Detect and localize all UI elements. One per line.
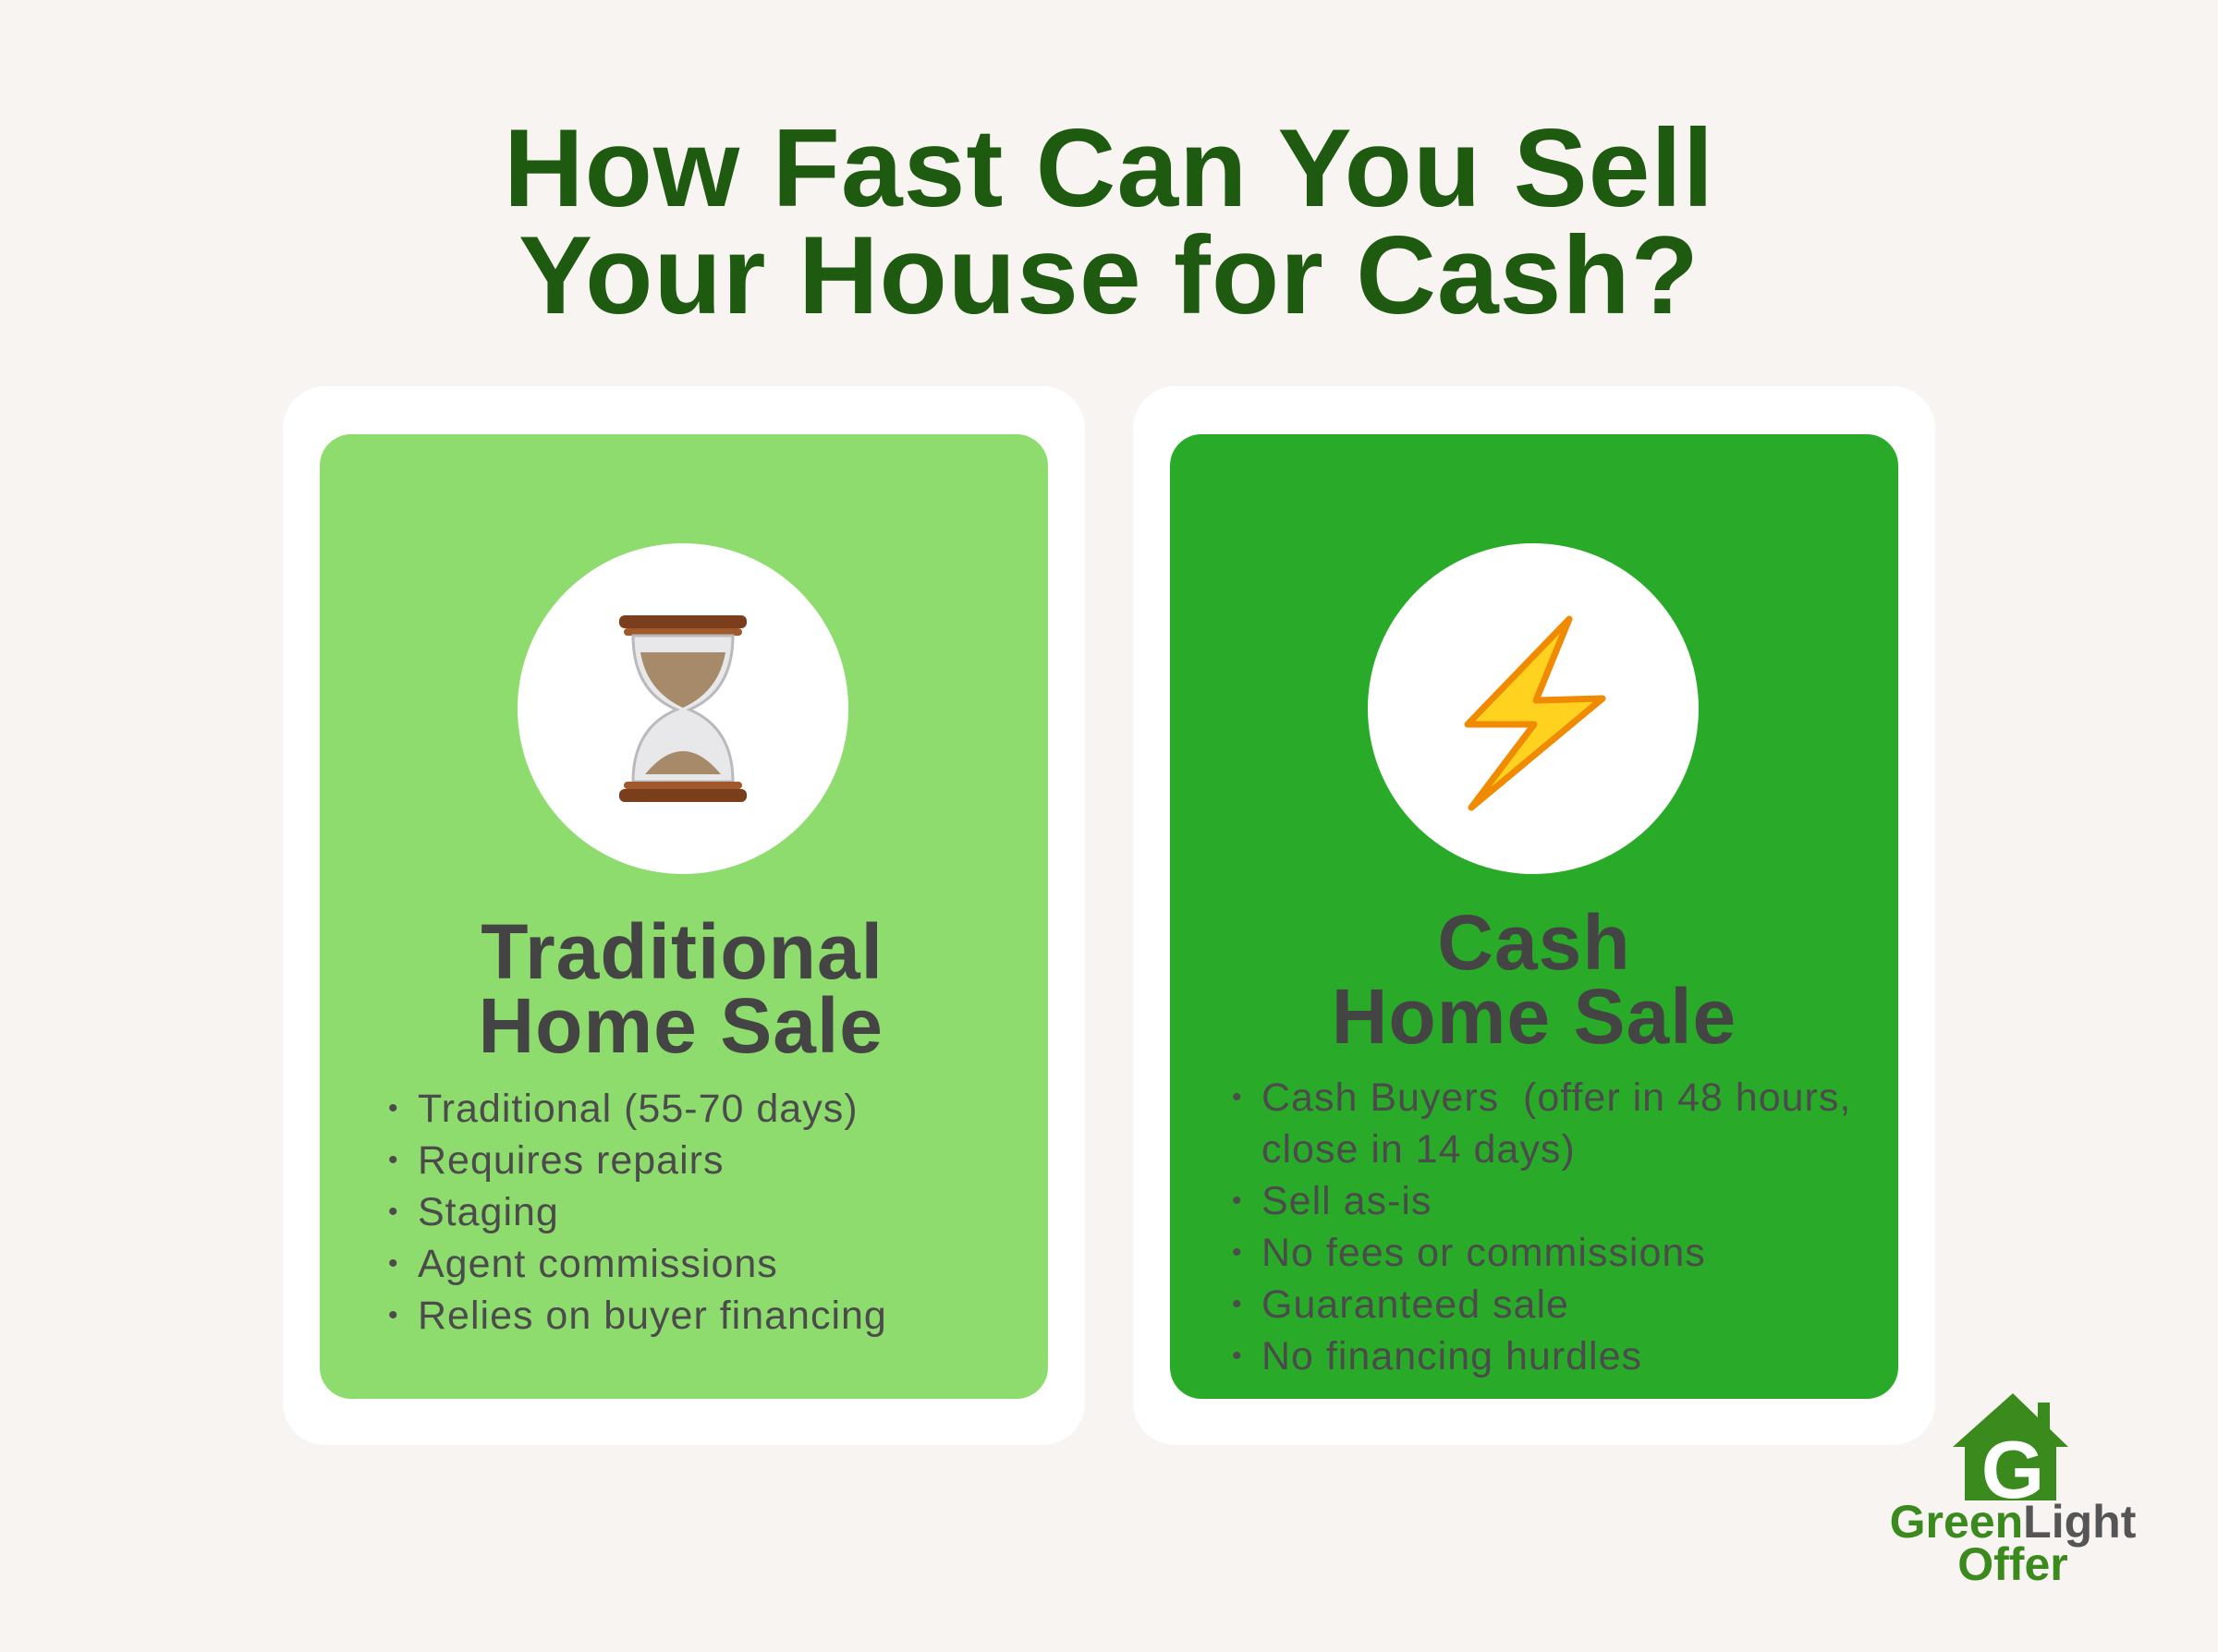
traditional green card [320,434,1048,1399]
list: traditional: Traditional (55-70 days) [418,1087,859,1131]
list: traditional: Requires repairs [418,1138,724,1183]
logo text [1890,1496,2136,1590]
logo text: Offer [1957,1538,2068,1590]
icon: hourglass [518,543,848,874]
list: traditional [389,1087,887,1338]
heading: traditional: Home Sale [478,982,884,1069]
list: traditional: Relies on buyer financing [418,1294,887,1338]
list: cash: Cash Buyers (offer in 48 hours, close in 14 days) [1261,1075,1851,1172]
heading: traditional [478,908,884,1069]
list: cash: Guaranteed sale [1261,1282,1569,1327]
heading: cash: Cash [1437,899,1631,986]
list: cash: No financing hurdles [1261,1334,1642,1379]
cash green card [1170,434,1898,1399]
list: cash [1233,1075,1851,1379]
title: Your House for Cash? [518,213,1700,337]
list: traditional: Staging [418,1190,559,1234]
logo [1890,1393,2136,1590]
heading: traditional: Traditional [481,908,884,995]
icon: lightning [1368,543,1699,874]
logo text: GreenLight [1890,1496,2136,1548]
title: How Fast Can You Sell [504,106,1714,230]
title [504,106,1714,337]
panel: cash [1133,386,1935,1445]
heading: cash [1332,899,1737,1060]
heading: cash: Home Sale [1332,973,1737,1060]
list: traditional: Agent commissions [418,1242,778,1286]
logo house [1953,1393,2068,1502]
panel: traditional [283,386,1085,1445]
list: cash: Sell as-is [1261,1179,1432,1223]
list: cash: No fees or commissions [1261,1231,1706,1275]
